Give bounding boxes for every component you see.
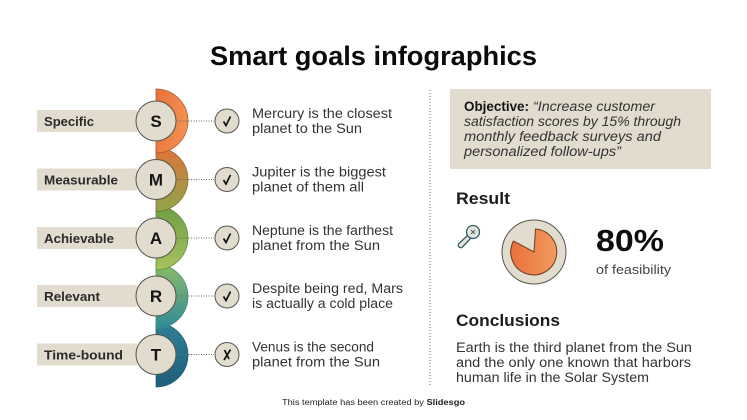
stat caption: of feasibility	[596, 262, 672, 277]
text: Mars: Despite being red, Mars	[252, 281, 403, 296]
text: Mars	[252, 281, 403, 311]
badge: T: T	[151, 346, 162, 364]
label: Measurable: Measurable	[44, 172, 118, 188]
label: Relevant	[37, 285, 137, 307]
badge: S	[136, 101, 176, 141]
text: Venus: Venus is the second	[252, 340, 374, 354]
panel: objective	[450, 89, 711, 169]
panel: objective: Objective:	[464, 99, 529, 114]
label: Specific	[37, 110, 137, 132]
connector	[156, 354, 214, 356]
icon: check	[215, 284, 239, 308]
panel: objective: monthly feedback surveys and	[464, 129, 662, 144]
row: Time-bound	[37, 334, 380, 374]
badge: M: M	[149, 170, 163, 190]
label: Achievable	[37, 227, 137, 249]
connector	[156, 120, 214, 122]
text: Mercury	[252, 106, 392, 136]
row: Relevant	[37, 276, 403, 316]
text: Mars: is actually a cold place	[252, 296, 393, 311]
text: Jupiter: planet of them all	[252, 180, 364, 194]
row: Achievable	[37, 218, 393, 258]
text: conclusions: human life in the Solar System	[456, 370, 649, 385]
row: Measurable	[37, 160, 386, 200]
label: Measurable	[37, 168, 137, 190]
row: Specific	[37, 101, 392, 141]
pie chart: 80%	[502, 220, 566, 284]
label: Specific: Specific	[44, 114, 94, 129]
text: Jupiter	[252, 164, 386, 194]
badge: M	[136, 160, 176, 200]
label: Time-bound: Time-bound	[44, 348, 123, 362]
badge: S: S	[150, 112, 162, 131]
footer credit: This template has been created by Slidesgo	[282, 398, 465, 407]
text: conclusions: and the only one known that harbors	[456, 355, 691, 370]
text: conclusions	[456, 340, 692, 385]
text: Mercury: planet to the Sun	[252, 121, 362, 136]
semicircle: blue	[156, 323, 188, 387]
badge: R	[136, 276, 176, 316]
stat: 80%: 80%	[596, 223, 664, 258]
text: Venus	[252, 340, 380, 370]
title: Smart goals infographics	[210, 41, 537, 71]
connector	[156, 295, 214, 297]
text: Neptune: planet from the Sun	[252, 238, 380, 253]
text: conclusions: Earth is the third planet from the Sun	[456, 340, 692, 355]
icon: magnifier	[458, 226, 480, 248]
badge: T	[136, 334, 176, 374]
panel: objective: personalized follow-ups”	[463, 144, 622, 159]
label: Achievable: Achievable	[44, 231, 114, 246]
icon: check	[215, 168, 239, 192]
vertical divider	[429, 90, 431, 385]
connector	[156, 237, 214, 239]
connector	[156, 178, 214, 180]
badge: A: A	[150, 229, 162, 248]
label: Time-bound	[37, 344, 137, 366]
semicircle: orange to green	[156, 148, 188, 212]
text: Mercury: Mercury is the closest	[252, 106, 392, 121]
icon: check	[215, 226, 239, 250]
text: Neptune: Neptune is the farthest	[252, 223, 393, 238]
icon: check	[215, 109, 239, 133]
badge: A	[136, 218, 176, 258]
semicircle: green to teal	[156, 264, 188, 328]
semicircle: orange	[156, 89, 188, 153]
text: Jupiter: Jupiter is the biggest	[252, 164, 386, 180]
badge: R: R	[150, 287, 162, 306]
icon: cross	[215, 342, 239, 366]
heading: Conclusions: Conclusions	[456, 311, 560, 330]
semicircle: green	[156, 206, 188, 270]
heading: Result: Result	[456, 189, 510, 208]
label: Relevant: Relevant	[44, 289, 101, 304]
text: Venus: planet from the Sun	[252, 354, 380, 370]
semicircle spine	[156, 89, 188, 387]
text: Neptune	[252, 223, 393, 253]
panel: objective: satisfaction scores by 15% through	[464, 114, 681, 129]
panel: objective: “Increase customer	[533, 99, 656, 114]
